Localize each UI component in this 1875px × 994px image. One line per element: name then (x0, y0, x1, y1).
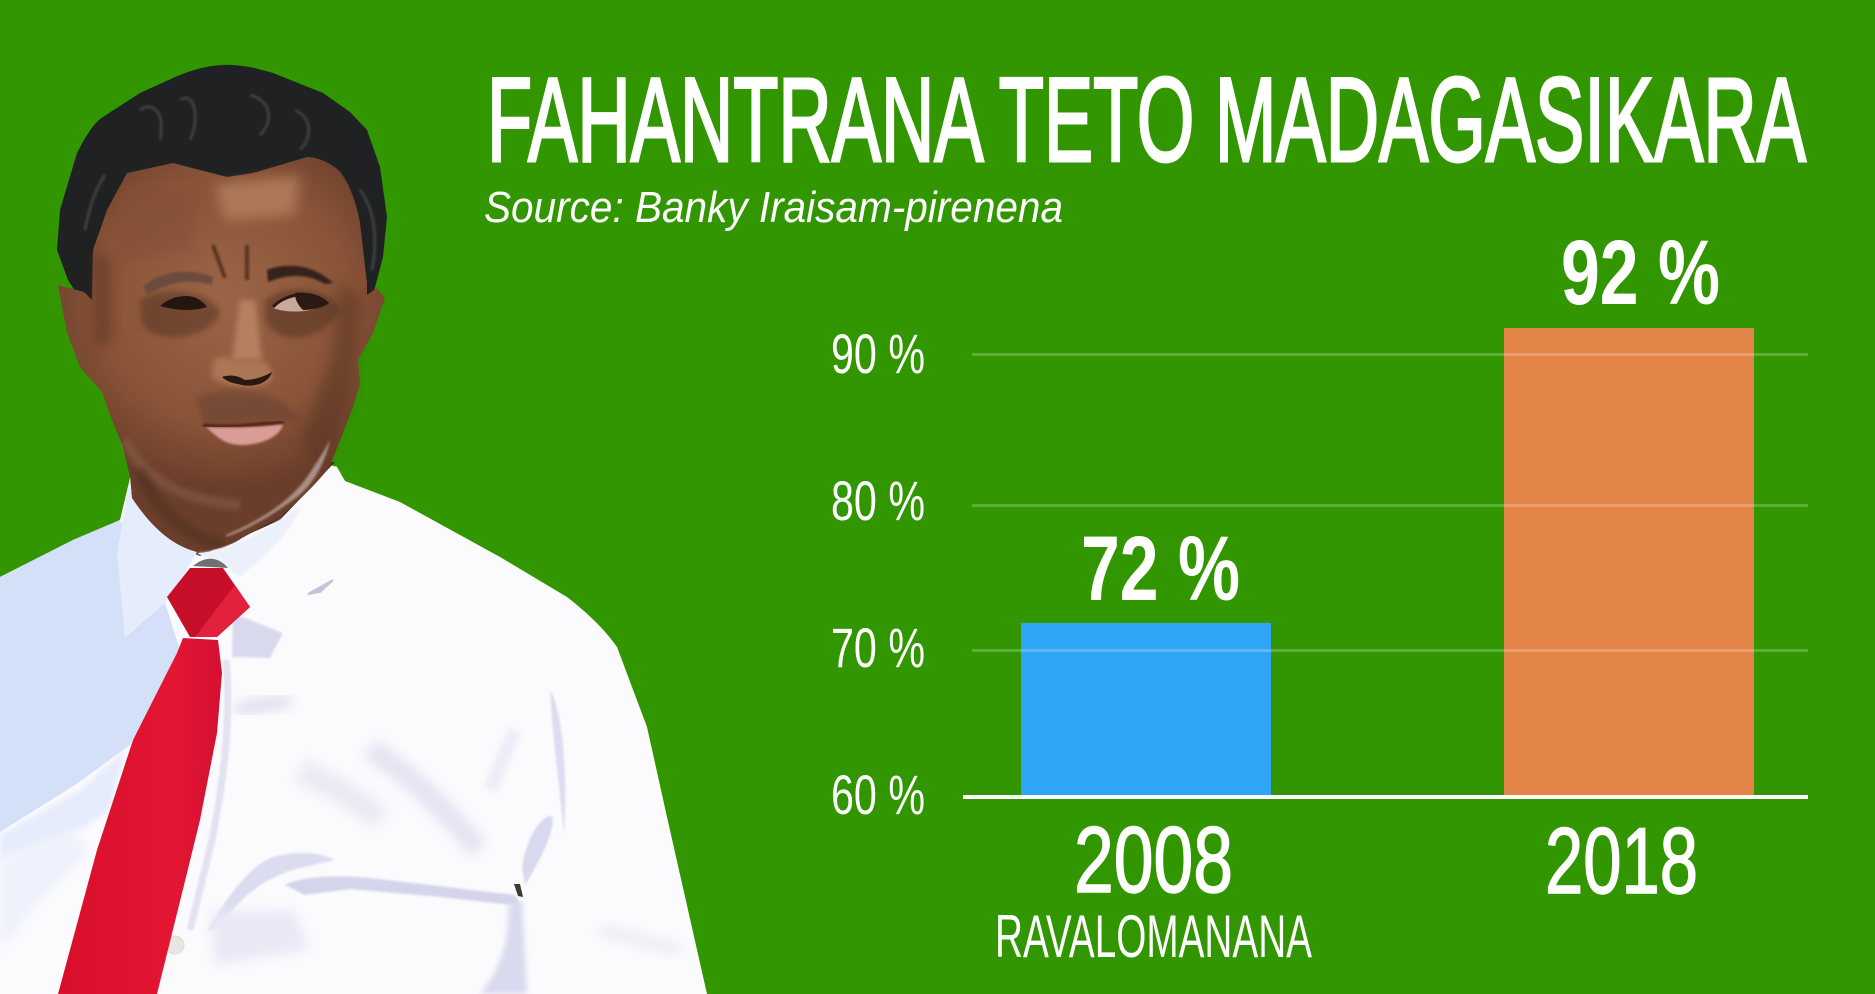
value label: 72 %: 72 % (1081, 518, 1240, 620)
face: forehead highlight (215, 175, 300, 220)
shirt: placket (190, 660, 228, 930)
bar: 2018 (1504, 328, 1754, 796)
shirt: folds (285, 876, 521, 906)
y axis labels: 60 % (831, 763, 925, 826)
y axis labels: 90 % (831, 322, 925, 385)
shirt: shaded left side (0, 520, 180, 832)
category label: 2008: 2008 (1074, 807, 1233, 912)
y axis labels: 70 % (831, 616, 925, 679)
upper lip shadow (195, 390, 298, 425)
collar (117, 466, 345, 638)
hair (57, 65, 387, 335)
face: brow furrows (213, 245, 247, 280)
bar: 2008 (1021, 623, 1271, 796)
face (58, 157, 385, 552)
nose (232, 300, 262, 360)
face: side shadows (300, 280, 362, 470)
mouth (206, 424, 283, 445)
candidate label: Ravalomanana: RAVALOMANANA (995, 903, 1312, 970)
tie: knot (167, 568, 250, 637)
shirt (0, 465, 707, 994)
neck shadow (130, 462, 335, 556)
x axis (963, 795, 1808, 799)
eyebrows (143, 272, 213, 295)
chin fold (226, 440, 330, 537)
photo: man in white shirt and red tie (0, 65, 707, 994)
hair highlights (85, 95, 375, 270)
eye: right (273, 296, 327, 312)
bar chart (831, 222, 1808, 970)
head and neck (57, 65, 387, 556)
category label: 2018: 2018 (1545, 808, 1698, 913)
red tie (58, 559, 250, 994)
tie: neck band (193, 559, 228, 568)
source line: Source: Banky Iraisam-pirenena (484, 183, 1063, 232)
tie: blade (58, 638, 222, 994)
gridlines (972, 353, 1808, 652)
value label: 92 %: 92 % (1561, 222, 1720, 324)
face: eye sockets (140, 291, 220, 337)
shirt: button (166, 936, 184, 954)
shirt: armpit crease (514, 884, 523, 897)
y axis labels (831, 322, 925, 826)
y axis labels: 80 % (831, 469, 925, 532)
eye: left (160, 296, 207, 310)
